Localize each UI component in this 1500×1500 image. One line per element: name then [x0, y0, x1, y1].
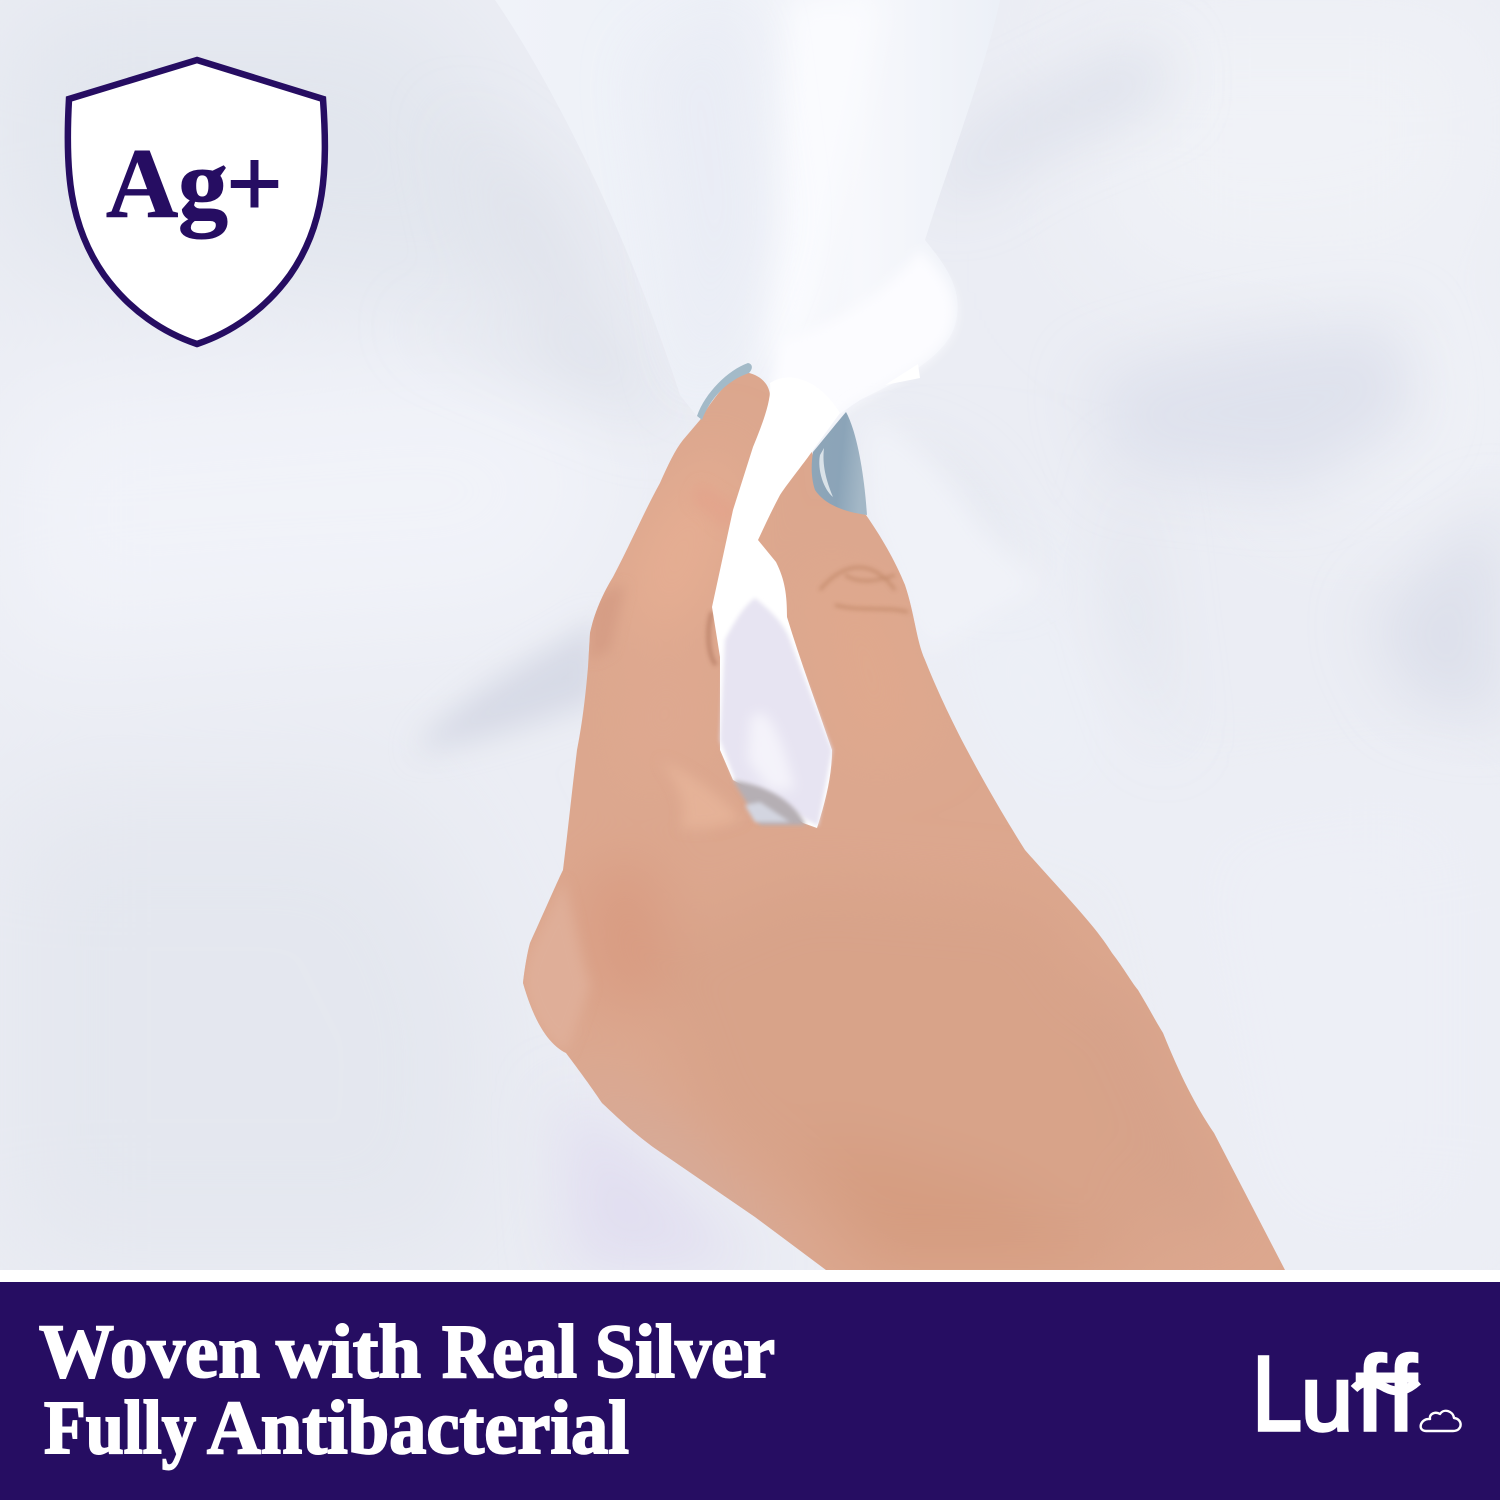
- white separator: [0, 1270, 1500, 1282]
- bottom banner: [0, 1282, 1500, 1500]
- icon: cloud: [1421, 1411, 1461, 1431]
- heading: woven with real silver: Silver: [595, 1310, 775, 1394]
- badge: Ag+ shield: [68, 60, 325, 344]
- heading: fully antibacterial: Fully: [44, 1386, 196, 1470]
- logo: Luff: u: [1301, 1348, 1353, 1450]
- heading: woven with real silver: Woven: [39, 1310, 260, 1394]
- hand: [523, 372, 1285, 1270]
- fabric shadow band right of the pinch: [1120, 328, 1412, 480]
- logo: Luff: ff: [1356, 1335, 1417, 1453]
- fabric fold shadow: [431, 627, 590, 750]
- heading: fully antibacterial: Antibacterial: [207, 1386, 629, 1470]
- heading: woven with real silver: Real: [442, 1310, 577, 1394]
- fabric gathered between finger and thumb: [712, 377, 840, 828]
- thumb nail: [812, 412, 867, 515]
- heading: woven with real silver: [39, 1310, 775, 1394]
- badge text: Ag+: [106, 128, 283, 239]
- heading: woven with real silver: with: [276, 1310, 421, 1394]
- finger crease: [709, 612, 716, 665]
- logo: Luff: L: [1252, 1335, 1302, 1453]
- fabric pleat above the hand: [760, 0, 964, 450]
- fabric drape right of the thumb: [894, 460, 986, 568]
- logo: Luff: [1252, 1335, 1461, 1453]
- index finger nail: [697, 363, 752, 420]
- thumb knuckle creases: [820, 567, 908, 612]
